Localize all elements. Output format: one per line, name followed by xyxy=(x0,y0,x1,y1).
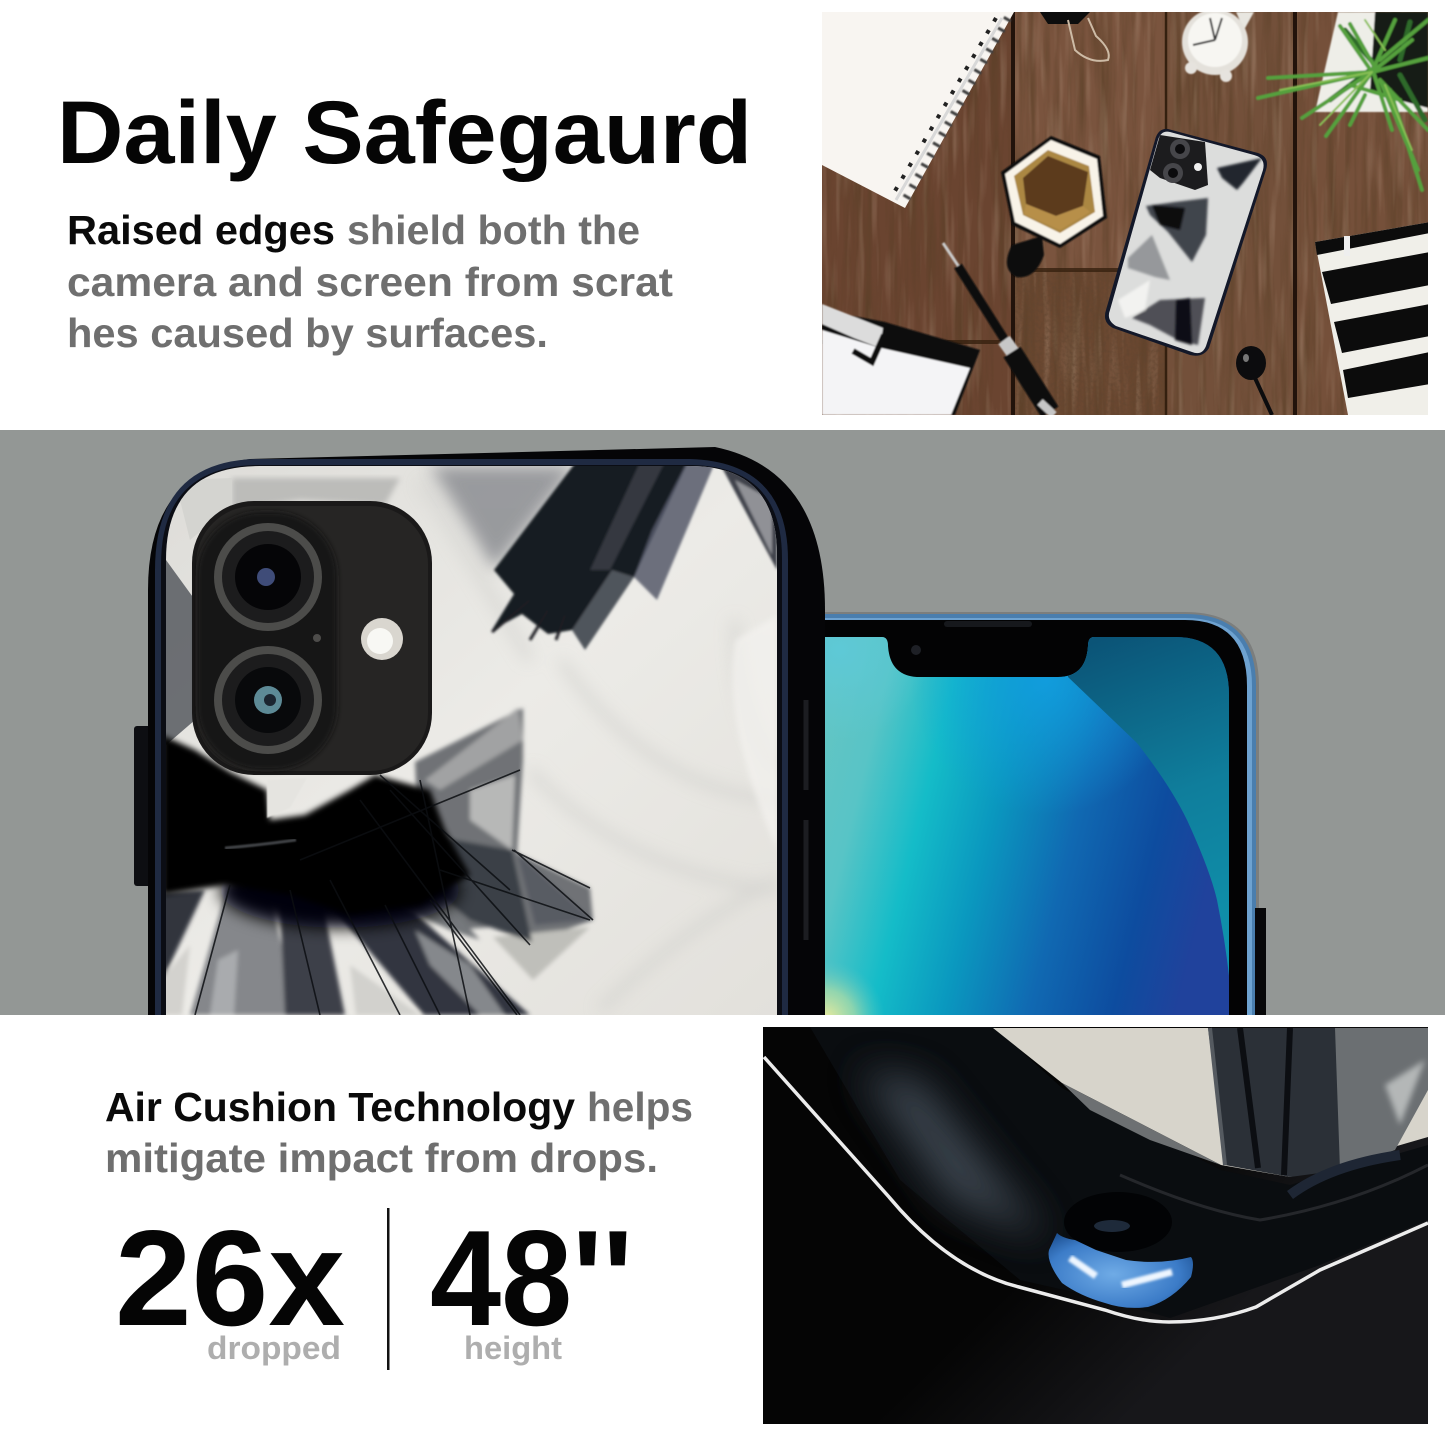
text block: raised edges description: camera and screen from scrat xyxy=(67,259,673,305)
pen xyxy=(943,243,1054,415)
text block: air cushion description xyxy=(105,1084,693,1181)
air cushion bubble xyxy=(1049,1192,1193,1308)
iPhone screen wallpaper xyxy=(825,630,1230,1015)
panel: desk lifestyle photo xyxy=(822,9,1430,415)
flash xyxy=(361,618,403,660)
camera module xyxy=(192,501,432,775)
wood desk planks xyxy=(822,12,1428,415)
striped notebook xyxy=(1315,222,1430,415)
case bumper highlight band xyxy=(810,1027,1428,1318)
stat: 26x dropped: dropped xyxy=(207,1330,341,1366)
text block: raised edges description: Raised edges xyxy=(67,207,335,253)
iPhone front view xyxy=(800,612,1266,1015)
text block: raised edges description: hes caused by surfaces. xyxy=(67,310,548,356)
stat: 26x dropped: 26x xyxy=(115,1202,345,1354)
text block: raised edges description: shield both the xyxy=(347,207,640,253)
clipboard xyxy=(822,304,980,415)
mini phone with case xyxy=(1100,125,1270,365)
title: Daily Safegaurd xyxy=(57,82,752,182)
alarm clock xyxy=(1182,9,1254,82)
panel: phones in grey band xyxy=(134,447,1266,1020)
text block: raised edges description xyxy=(67,207,673,356)
text block: air cushion description: Air Cushion Technology xyxy=(105,1084,575,1130)
upper ribbon xyxy=(492,460,777,650)
soft sheer layers of the bow xyxy=(155,708,593,1015)
microphone dot xyxy=(313,634,321,642)
case artwork: sheer black ribbons on white xyxy=(155,460,785,1020)
fabric seen through the case xyxy=(993,1028,1428,1177)
inner rim curves xyxy=(1120,1165,1428,1220)
camera lens: upper xyxy=(214,523,322,631)
white edge line xyxy=(764,1057,1428,1322)
ribbon edge lines xyxy=(195,770,593,1015)
text block: air cushion description: helps xyxy=(587,1084,693,1130)
panel: grey product band xyxy=(0,430,1445,1015)
spiral notebook xyxy=(822,12,1014,208)
text block: air cushion description: mitigate impact from drops. xyxy=(105,1135,658,1181)
lower ribbon bow xyxy=(155,708,593,1015)
soft fabric folds xyxy=(498,612,769,898)
grey haze at top xyxy=(430,466,576,570)
phone case outer body xyxy=(134,447,825,1015)
plant xyxy=(1258,12,1428,190)
coffee mug xyxy=(1001,136,1107,277)
binder clip xyxy=(1040,12,1109,61)
spoon xyxy=(1236,346,1272,415)
stat divider xyxy=(387,1208,390,1370)
black knot mass xyxy=(208,880,468,942)
camera lens: lower xyxy=(214,646,322,754)
stat: 48 inch height: height xyxy=(464,1330,562,1366)
stat: 48 inch height: 48'' xyxy=(430,1202,633,1354)
panel: air cushion close-up photo xyxy=(763,1027,1428,1424)
